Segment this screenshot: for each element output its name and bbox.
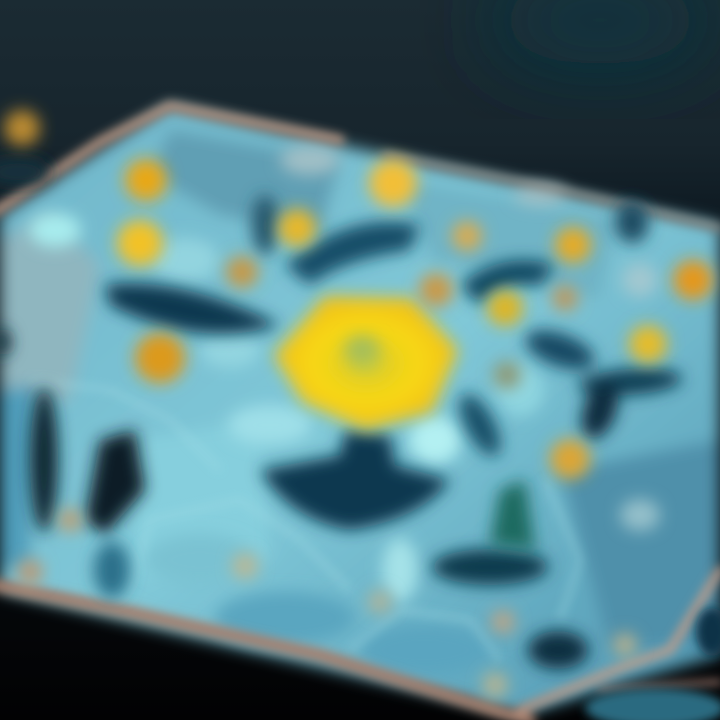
pale cell seams [30, 380, 580, 660]
green accent [490, 480, 535, 550]
dark navy connectors [0, 158, 683, 669]
central yellow hub [274, 296, 458, 430]
dark pillars [30, 388, 145, 598]
bottom right dark cell [585, 608, 720, 720]
pale cyan cells [29, 145, 660, 676]
